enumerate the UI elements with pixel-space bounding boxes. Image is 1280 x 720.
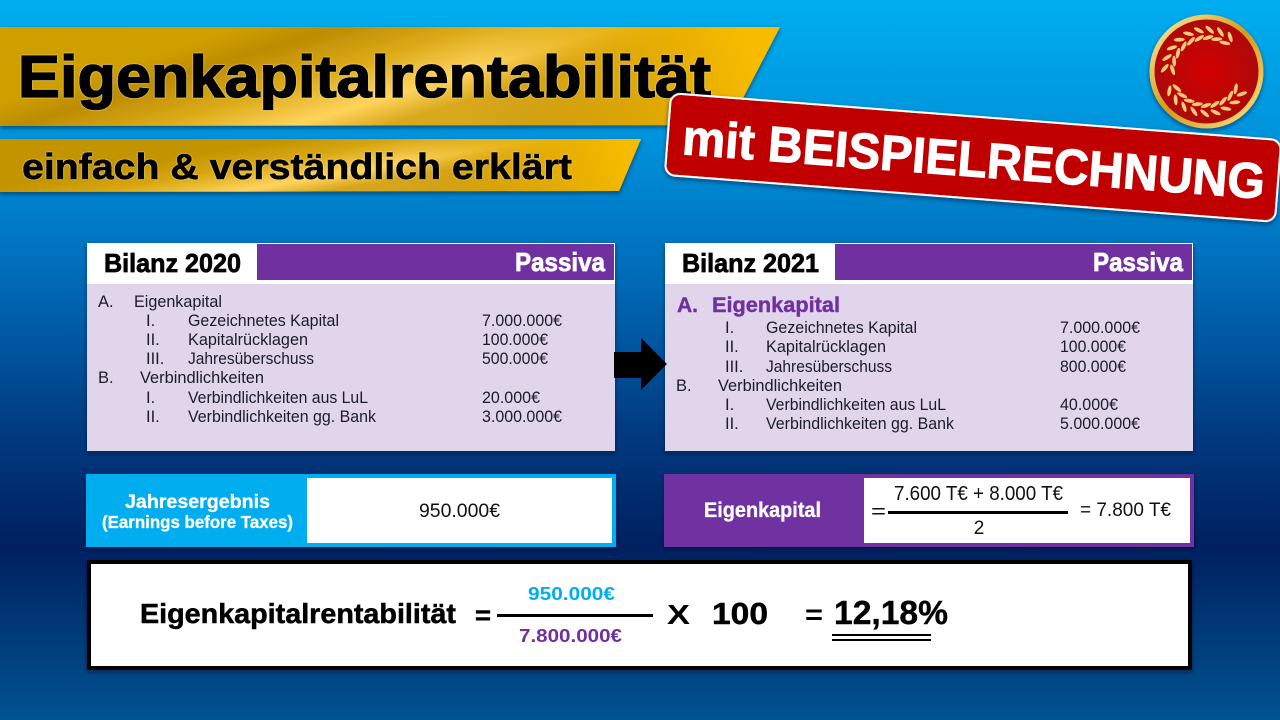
balance sheet rows 2021: Jahresüberschuss — [766, 358, 892, 376]
label: Jahresergebnis: Jahresergebnis — [125, 492, 270, 513]
balance sheet rows 2021: Verbindlichkeiten — [718, 377, 842, 395]
balance sheet rows 2020: Jahresüberschuss — [188, 350, 314, 368]
panel: Bilanz 2021 — [665, 243, 1193, 451]
balance sheet rows 2021: B. — [676, 377, 692, 395]
fraction: = — [475, 600, 491, 630]
title banner — [0, 27, 780, 126]
balance sheet rows 2020: 100.000€ — [482, 331, 548, 349]
formula: average equity: 2 — [974, 518, 984, 539]
balance sheet rows 2021: I. — [725, 319, 734, 337]
balance sheet rows 2020: 3.000.000€ — [482, 408, 562, 426]
title text: Eigenkapitalrentabilität — [18, 44, 711, 110]
balance sheet rows 2020: I. — [146, 389, 155, 407]
balance sheet rows 2020: B. — [98, 369, 114, 387]
label: Eigenkapitalrentabilität: Eigenkapitalrentabilität — [140, 598, 456, 629]
balance sheet rows 2021: 5.000.000€ — [1060, 415, 1140, 433]
balance sheet rows 2020: Gezeichnetes Kapital — [188, 312, 339, 330]
formula: average equity: = 7.800 T€ — [1080, 500, 1171, 521]
multiply by 100: 100 — [712, 596, 768, 631]
fraction — [475, 584, 653, 646]
fraction: 7.800.000€ — [519, 626, 622, 646]
balance sheet rows 2020: A. — [98, 293, 114, 311]
fraction: 950.000€ — [528, 584, 615, 604]
subtitle text: einfach & verständlich erklärt — [22, 146, 572, 187]
balance sheet rows 2020: II. — [146, 331, 160, 349]
balance sheet rows 2021: 100.000€ — [1060, 338, 1126, 356]
multiply by 100 — [667, 596, 768, 631]
balance sheet rows 2020: 500.000€ — [482, 350, 548, 368]
balance sheet rows 2021: I. — [725, 396, 734, 414]
balance sheet rows 2020: 7.000.000€ — [482, 312, 562, 330]
balance sheet rows 2021 — [676, 294, 1140, 433]
balance sheet rows 2021: 7.000.000€ — [1060, 319, 1140, 337]
balance sheet rows 2021: 800.000€ — [1060, 358, 1126, 376]
heading: Bilanz 2021: Bilanz 2021 — [682, 248, 819, 278]
balance sheet rows 2020: Verbindlichkeiten — [140, 369, 264, 387]
balance sheet rows 2020 — [98, 293, 562, 426]
callout: mit Beispielrechnung: mit BEISPIELRECHNUNG — [681, 109, 1267, 210]
heading: Passiva: Passiva — [515, 247, 605, 277]
arrow: 2020 to 2021 — [614, 338, 667, 390]
heading: Passiva: Passiva — [1093, 247, 1183, 277]
panel: Eigenkapitalrentabilität formula — [89, 562, 1190, 668]
label: Eigenkapital: Eigenkapital — [704, 499, 821, 522]
balance sheet rows 2020: II. — [146, 408, 160, 426]
balance sheet rows 2021: Kapitalrücklagen — [766, 338, 886, 356]
result: 12,18%: = — [805, 599, 823, 630]
balance sheet rows 2020: Verbindlichkeiten gg. Bank — [188, 408, 377, 426]
balance sheet rows 2021: II. — [725, 415, 739, 433]
value: 950.000€: 950.000€ — [419, 501, 500, 522]
balance sheet rows 2020: I. — [146, 312, 155, 330]
balance sheet rows 2021: Eigenkapital — [712, 294, 840, 317]
formula: average equity: 7.600 T€ + 8.000 T€ — [894, 483, 1063, 505]
balance sheet rows 2020: 20.000€ — [482, 389, 540, 407]
icon: gold medal with laurel — [1150, 14, 1264, 128]
balance sheet rows 2021: A. — [677, 294, 698, 317]
balance sheet rows 2021: II. — [725, 338, 739, 356]
result: 12,18%: 12,18% — [834, 594, 948, 631]
balance sheet rows 2020: Verbindlichkeiten aus LuL — [188, 389, 368, 407]
formula: average equity: = — [871, 501, 886, 523]
balance sheet rows 2020: III. — [146, 350, 164, 368]
balance sheet rows 2021: III. — [725, 358, 743, 376]
heading: Bilanz 2020: Bilanz 2020 — [104, 248, 241, 278]
panel: Jahresergebnis — [86, 474, 616, 547]
label: Earnings before Taxes: (Earnings before Taxes) — [102, 512, 293, 532]
balance sheet rows 2021: Verbindlichkeiten aus LuL — [766, 396, 946, 414]
subtitle banner — [0, 139, 641, 192]
multiply by 100: X — [667, 599, 690, 630]
balance sheet rows 2021: Gezeichnetes Kapital — [766, 319, 917, 337]
balance sheet rows 2020: Eigenkapital — [134, 293, 222, 311]
balance sheet rows 2021: Verbindlichkeiten gg. Bank — [766, 415, 955, 433]
panel: Eigenkapital — [664, 474, 1194, 547]
balance sheet rows 2021: 40.000€ — [1060, 396, 1118, 414]
result: 12,18% — [805, 594, 948, 641]
formula: average equity — [871, 483, 1171, 539]
panel: Bilanz 2020 — [87, 243, 615, 451]
balance sheet rows 2020: Kapitalrücklagen — [188, 331, 308, 349]
